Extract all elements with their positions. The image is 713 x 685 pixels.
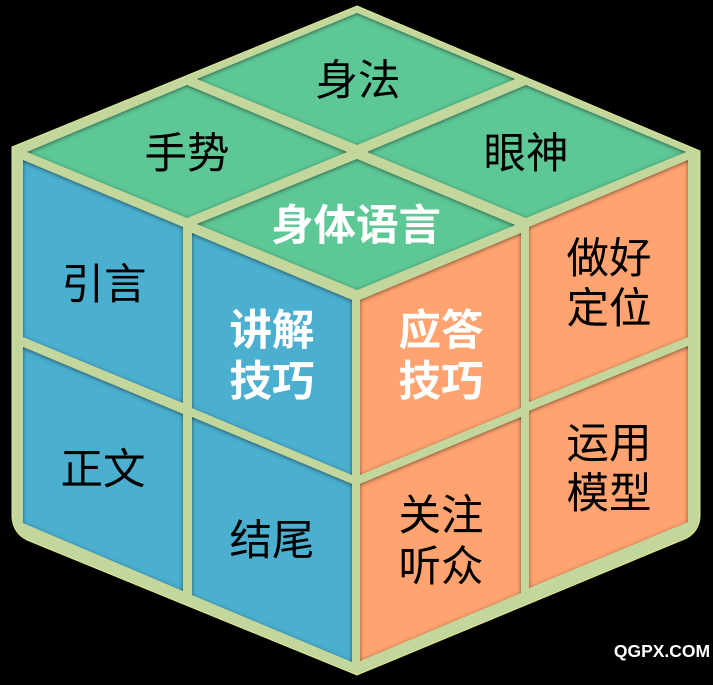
panel: 做好定位 (529, 160, 688, 402)
panel: 身法 (197, 13, 515, 145)
watermark: QGPX.COM (614, 641, 710, 661)
panel: 运用模型: 运用 (566, 421, 652, 468)
panel: 结尾: 结尾 (229, 518, 315, 565)
panel: 眼神 (367, 85, 686, 218)
panel: 手势: 手势 (144, 131, 230, 178)
panel: 做好定位: 定位 (566, 286, 652, 333)
panel: 讲解技巧: 讲解 (229, 308, 315, 355)
panel: left face (23, 160, 352, 662)
panel: 应答技巧: 应答 (398, 308, 484, 355)
panel: 手势 (27, 85, 347, 218)
panel: 应答技巧: 技巧 (398, 359, 484, 406)
panel: 身体语言 (197, 159, 515, 290)
panel: 眼神: 眼神 (483, 131, 569, 178)
panel: 关注听众: 听众 (398, 544, 484, 591)
panel: 讲解技巧: 技巧 (229, 359, 315, 406)
panel: 讲解技巧 (192, 233, 352, 475)
panel: 做好定位: 做好 (566, 236, 652, 283)
panel: 引言: 引言 (61, 262, 147, 309)
panel: 关注听众 (360, 417, 521, 661)
panel: 引言 (23, 160, 183, 403)
panel: 正文: 正文 (60, 447, 146, 494)
panel: 运用模型: 模型 (566, 471, 652, 518)
panel: top face (27, 13, 686, 290)
panel: 结尾 (192, 417, 352, 662)
panel: 关注听众: 关注 (398, 493, 484, 540)
panel: 运用模型 (529, 346, 688, 588)
panel: 正文 (23, 347, 183, 591)
panel: right face (360, 160, 688, 661)
panel: 身体语言: 身体语言 (271, 203, 441, 250)
panel: 应答技巧 (360, 233, 521, 475)
panel: 身法: 身法 (315, 58, 401, 105)
